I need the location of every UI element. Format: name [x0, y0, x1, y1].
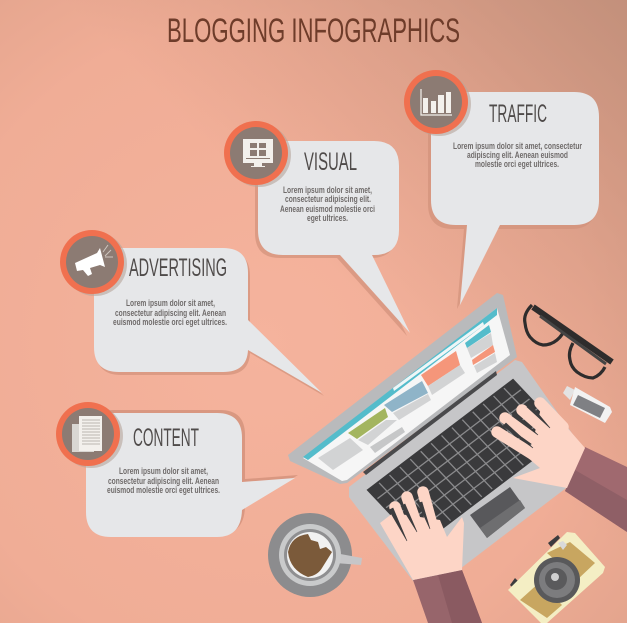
text: content body: euismod molestie orci eget ultrices.: [107, 485, 220, 495]
laptop base: [349, 360, 595, 594]
panel: visual: [224, 121, 410, 336]
illustration: left arm: [413, 570, 482, 623]
text: visual body: Aenean euismod molestie orci: [280, 204, 375, 214]
heading: advertising: ADVERTISING: [129, 254, 227, 282]
text: advertising body: euismod molestie orci eget ultrices.: [113, 317, 227, 327]
heading: traffic: TRAFFIC: [489, 100, 547, 128]
illustration: right arm: [565, 447, 627, 532]
panel: content: [56, 402, 298, 537]
icon: megaphone: [60, 230, 127, 296]
illustration: glasses: [525, 305, 612, 378]
title: BLOGGING INFOGRAPHICS: [167, 12, 460, 50]
illustration: right hand: [497, 400, 585, 488]
text: visual body: consectetur adipiscing elit.: [285, 194, 371, 204]
laptop screen: [288, 293, 517, 484]
text: content body: Lorem ipsum dolor sit amet,: [119, 466, 208, 476]
illustration: coffee cup: [268, 513, 362, 597]
illustration: camera: [508, 532, 605, 623]
text: traffic body: molestie orci eget ultrices.: [475, 159, 559, 169]
panel: traffic: [404, 70, 599, 309]
text: advertising body: Lorem ipsum dolor sit amet,: [126, 298, 215, 308]
text: content body: consectetur adipiscing elit. Aenean: [108, 476, 219, 486]
keyboard: [368, 380, 565, 545]
icon: bar chart: [404, 70, 471, 136]
touchpad: [470, 487, 525, 538]
text: advertising body: consectetur adipiscing elit. Aenean: [115, 308, 226, 318]
text: traffic body: Lorem ipsum dolor sit amet, consectetur: [453, 141, 582, 151]
text: traffic body: adipiscing elit. Aenean euismod: [467, 150, 568, 160]
text: visual body: eget ultrices.: [307, 213, 348, 223]
icon: documents: [56, 402, 123, 468]
heading: content: CONTENT: [133, 424, 199, 452]
illustration: USB stick: [563, 386, 612, 423]
text: visual body: Lorem ipsum dolor sit amet,: [283, 185, 372, 195]
panel: advertising: [60, 230, 324, 396]
illustration: left hand: [380, 492, 464, 580]
hinge: [363, 371, 497, 475]
icon: monitor: [224, 121, 291, 187]
illustration: laptop: [288, 293, 595, 594]
heading: visual: VISUAL: [304, 148, 357, 176]
